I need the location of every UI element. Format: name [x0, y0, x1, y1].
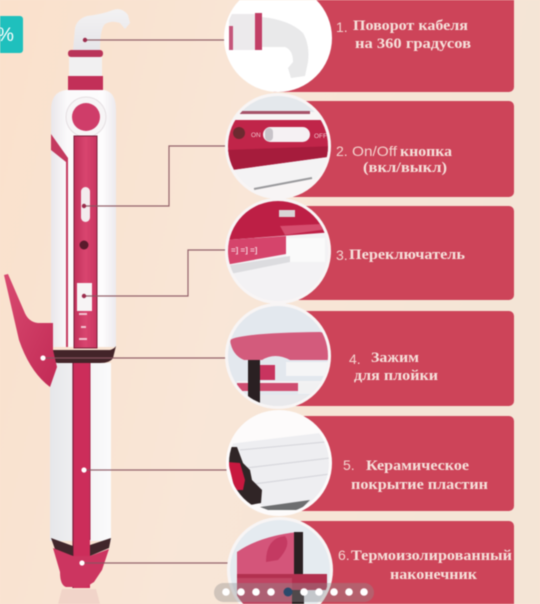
detail circle 6: tip — [225, 517, 335, 604]
cable hook — [73, 9, 130, 50]
panel: feature 1 — [270, 0, 514, 92]
panel: feature 2 — [270, 101, 514, 197]
panel: feature 3: 3. — [336, 247, 348, 263]
detail circle 1: cable swivel — [224, 0, 332, 92]
panel: feature 5: покрытие пластин — [351, 477, 488, 493]
indicator light — [80, 240, 88, 250]
panel: feature 5: 5. — [343, 457, 355, 473]
discount badge — [0, 16, 23, 53]
detail circle 2: on/off button: OFF — [314, 133, 327, 140]
heat-insulated tip — [53, 548, 109, 587]
panel: feature 2: On/Off — [352, 143, 397, 159]
detail circle 3: switch — [225, 198, 335, 305]
tip insulation — [51, 538, 111, 556]
tip reflection — [58, 589, 100, 604]
carousel pager — [214, 583, 374, 602]
panel: feature 6: Термоизолированный — [351, 548, 512, 564]
control strip — [74, 136, 97, 348]
panel: feature 3: Переключатель — [349, 247, 465, 263]
connector lines — [43, 40, 230, 563]
panel: feature 5: Керамическое — [366, 458, 469, 474]
panel: feature 1: Поворот кабеля — [353, 18, 468, 34]
detail circle 3: switch: =] =] =] — [231, 246, 258, 255]
dark clamp band — [53, 346, 116, 363]
panel: feature 4 — [270, 311, 514, 406]
panel: feature 2: кнопка — [400, 144, 453, 160]
swivel collar — [68, 50, 103, 91]
barrel strip — [73, 363, 90, 588]
panel: feature 1: 1. — [336, 19, 348, 35]
panel: feature 3 — [270, 206, 514, 300]
panel: feature 6: 6. — [338, 547, 350, 563]
curling iron — [4, 9, 230, 604]
panel: feature 4: Зажим — [371, 350, 419, 366]
panel: feature 4: 4. — [349, 351, 361, 367]
panel: feature 4: для плойки — [354, 368, 438, 384]
left pink accent — [51, 134, 68, 347]
detail circle 5: ceramic plates — [226, 410, 335, 516]
panel: feature 5 — [270, 416, 514, 511]
callout dots — [40, 38, 87, 566]
panel: feature 2: (вкл/выкл) — [363, 160, 447, 176]
power switch — [81, 187, 90, 222]
lower barrel — [50, 363, 111, 541]
detail circle 2: on/off button: ON — [251, 132, 261, 139]
detail circle 4: clamp — [225, 303, 335, 409]
panel: feature 6 — [270, 521, 514, 604]
panel: feature 2: 2. — [336, 143, 348, 159]
mode switch — [77, 283, 92, 311]
mode marks — [79, 313, 87, 340]
panel: feature 1: на 360 градусов — [355, 36, 471, 52]
clamp lever — [4, 274, 57, 387]
detail circle 2: on/off button — [225, 93, 335, 199]
round dial — [66, 97, 106, 137]
panel: feature 6: наконечник — [390, 567, 477, 583]
upper handle — [51, 90, 116, 347]
